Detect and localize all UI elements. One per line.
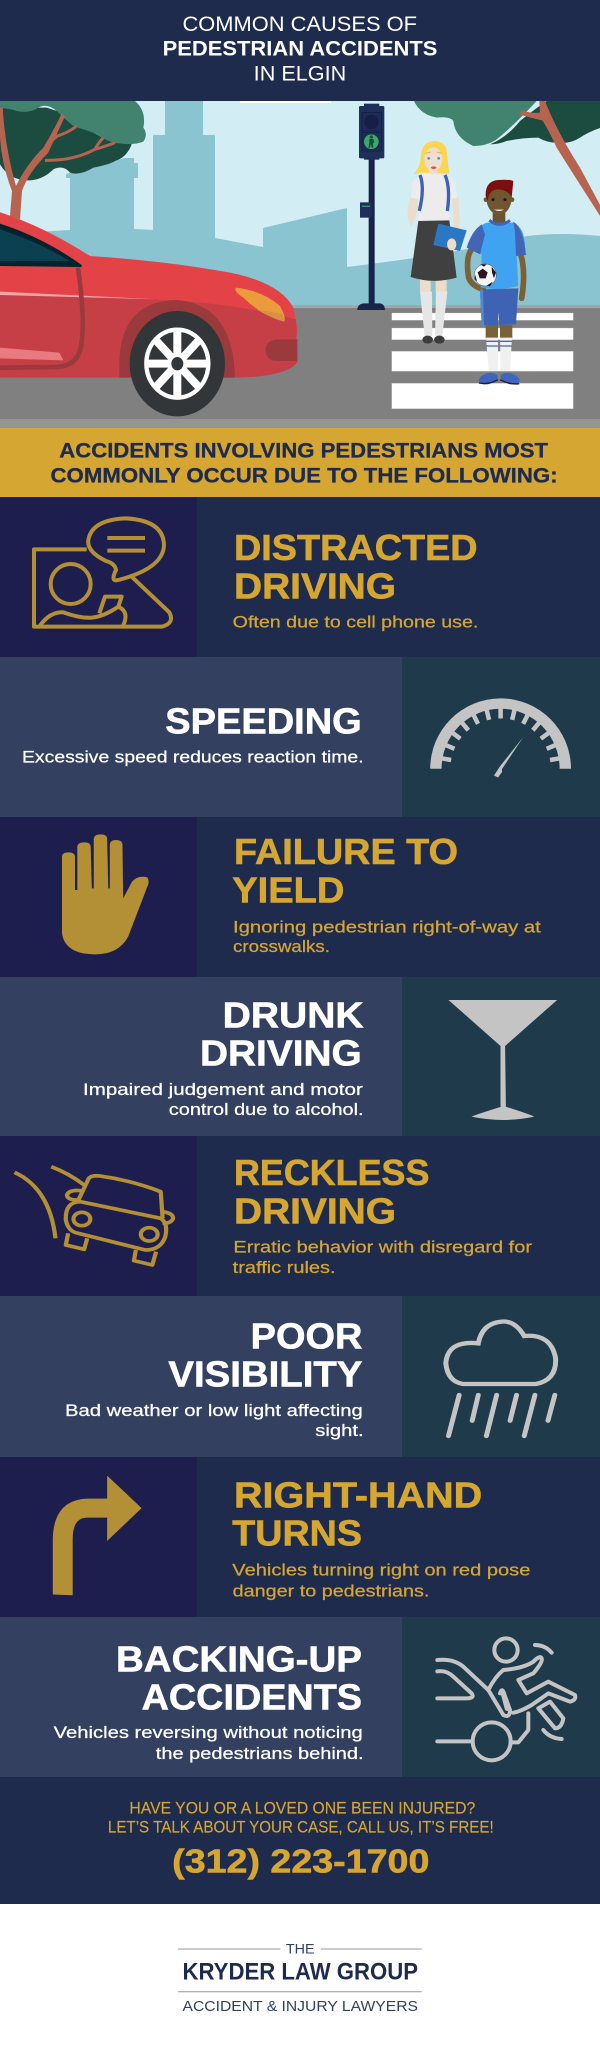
banner: intro statement: COMMONLY OCCUR DUE TO THE FOLLOWING: xyxy=(50,465,558,488)
wheel xyxy=(130,311,225,416)
heading and text: BACKING-UP xyxy=(116,1638,362,1679)
heading and text: DRIVING xyxy=(234,1190,396,1231)
heading and text xyxy=(232,831,541,956)
heading and text xyxy=(233,527,478,632)
panel: drunk driving xyxy=(0,977,600,1136)
phone number: (312) 223-1700 xyxy=(172,1842,429,1880)
title: PEDESTRIAN ACCIDENTS xyxy=(163,38,437,61)
heading and text: danger to pedestrians. xyxy=(233,1581,429,1600)
icon: raised hand xyxy=(62,834,149,954)
heading and text: Impaired judgement and motor xyxy=(83,1080,363,1099)
call to action panel xyxy=(0,1777,600,1904)
call to action text xyxy=(108,1798,494,1836)
icon: right turn arrow xyxy=(53,1476,142,1595)
heading and text xyxy=(54,1638,364,1763)
heading and text: sight. xyxy=(315,1421,364,1440)
heading and text: YIELD xyxy=(232,869,344,910)
heading and text: DRIVING xyxy=(234,565,396,606)
heading and text: Ignoring pedestrian right-of-way at xyxy=(233,917,541,936)
soccer ball xyxy=(474,264,496,286)
call to action text: LET’S TALK ABOUT YOUR CASE, CALL US, IT’S FREE! xyxy=(108,1818,494,1836)
panel: backing-up accidents xyxy=(0,1617,600,1777)
heading and text: Erratic behavior with disregard for xyxy=(233,1237,532,1256)
heading and text: VISIBILITY xyxy=(168,1354,362,1395)
title: COMMON CAUSES OF xyxy=(182,13,417,36)
heading and text: DISTRACTED xyxy=(234,527,478,568)
heading and text: SPEEDING xyxy=(165,700,362,741)
heading and text: the pedestrians behind. xyxy=(156,1744,364,1763)
heading and text: crosswalks. xyxy=(233,937,330,956)
title: IN ELGIN xyxy=(254,63,346,86)
heading and text: POOR xyxy=(251,1315,362,1356)
heading and text: FAILURE TO xyxy=(234,831,458,872)
banner: intro statement: ACCIDENTS INVOLVING PEDESTRIANS MOST xyxy=(59,440,548,463)
left tree xyxy=(0,101,146,219)
heading and text: RIGHT-HAND xyxy=(234,1474,482,1515)
heading and text xyxy=(232,1474,530,1600)
heading and text: traffic rules. xyxy=(233,1258,336,1277)
banner: intro statement xyxy=(0,428,600,497)
logo: The Kryder Law Group xyxy=(0,1904,600,2061)
icon: pedestrian struck by car xyxy=(437,1638,575,1760)
city skyline xyxy=(0,101,600,307)
heading and text: RECKLESS xyxy=(234,1152,429,1193)
heading and text xyxy=(22,700,364,767)
heading and text: Vehicles reversing without noticing xyxy=(54,1723,363,1742)
call to action text: HAVE YOU OR A LOVED ONE BEEN INJURED? xyxy=(129,1798,475,1818)
red car xyxy=(0,212,297,416)
heading and text xyxy=(65,1315,364,1440)
logo: The Kryder Law Group: THE xyxy=(286,1941,315,1957)
heading and text: DRIVING xyxy=(200,1033,362,1074)
boy with soccer ball xyxy=(467,180,526,386)
icon: swerving car xyxy=(15,1167,173,1265)
panel: right-hand turns xyxy=(0,1457,600,1617)
heading and text: Vehicles turning right on red pose xyxy=(232,1560,530,1579)
title xyxy=(163,13,437,86)
header panel xyxy=(0,0,600,101)
illustration: street scene xyxy=(0,101,600,428)
logo: The Kryder Law Group: KRYDER LAW GROUP xyxy=(182,1958,418,1985)
road xyxy=(0,305,600,428)
icon: rain cloud xyxy=(446,1322,556,1436)
heading and text: TURNS xyxy=(232,1512,362,1553)
heading and text: DRUNK xyxy=(223,995,364,1036)
girl with backpack xyxy=(411,141,467,344)
heading and text: Excessive speed reduces reaction time. xyxy=(22,748,364,767)
heading and text: Often due to cell phone use. xyxy=(233,613,478,632)
icon: phone message xyxy=(34,518,171,627)
panel: distracted driving xyxy=(0,497,600,657)
heading and text: ACCIDENTS xyxy=(142,1676,362,1717)
panel: failure to yield xyxy=(0,817,600,977)
logo: The Kryder Law Group: ACCIDENT & INJURY LAWYERS xyxy=(182,1998,418,2015)
pedestrian traffic light and crosswalk xyxy=(357,104,573,409)
heading and text: Bad weather or low light affecting xyxy=(65,1401,363,1420)
panel: speeding xyxy=(0,657,600,817)
heading and text xyxy=(83,995,364,1119)
heading and text xyxy=(233,1152,532,1277)
icon: martini glass xyxy=(448,1000,557,1120)
icon: speedometer xyxy=(430,698,571,778)
right tree xyxy=(414,101,600,221)
panel: poor visibility xyxy=(0,1296,600,1457)
panel: reckless driving xyxy=(0,1136,600,1296)
heading and text: control due to alcohol. xyxy=(169,1100,364,1119)
